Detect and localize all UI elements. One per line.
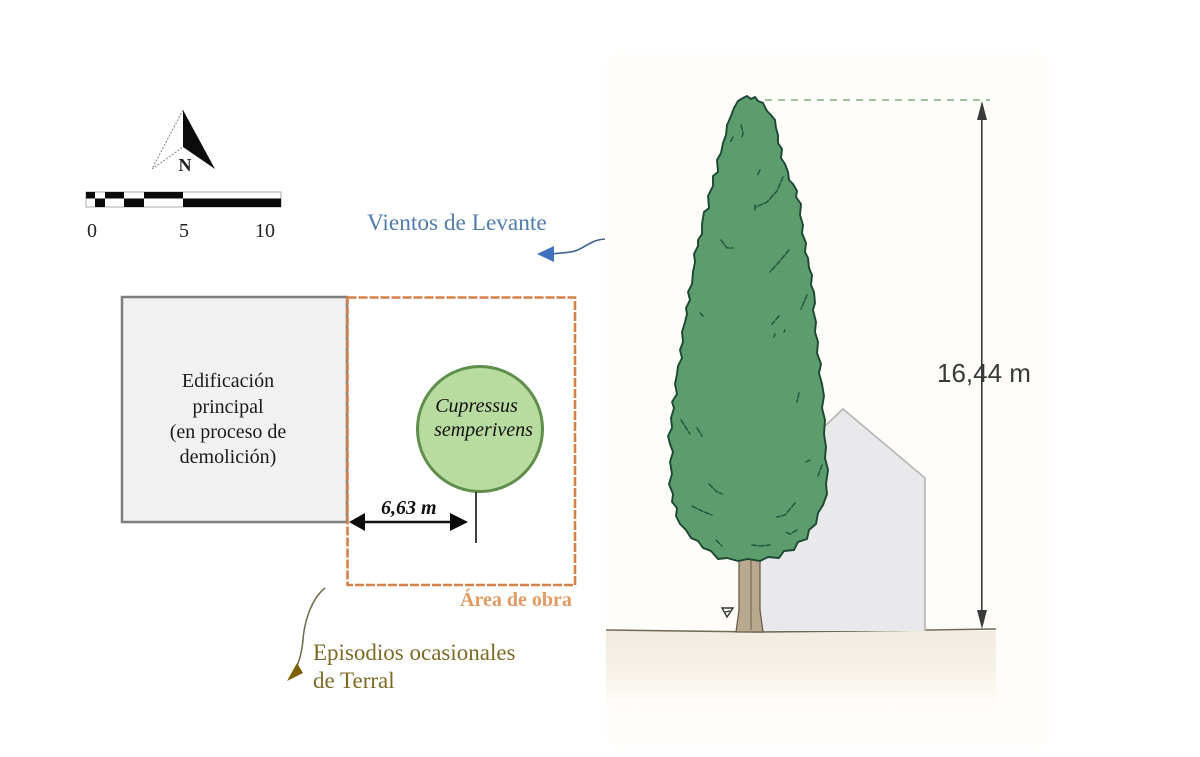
- foliage marks: [681, 125, 822, 546]
- label: Área de obra: Área de obra: [460, 588, 572, 611]
- panel: tree elevation background: [610, 55, 1046, 745]
- label: Vientos de Levante: Vientos de Levante: [367, 210, 547, 236]
- scale bar: 0: [87, 220, 97, 242]
- icon: north arrow: [152, 110, 215, 175]
- panel: main building: (en proceso de: [170, 421, 286, 443]
- tree trunk: [736, 558, 763, 632]
- tree crown: [668, 96, 828, 561]
- arrow: Levante wind: [537, 239, 605, 262]
- distance arrow: [349, 513, 468, 531]
- panel: work area: [348, 298, 575, 585]
- tree plan circle: [418, 366, 542, 492]
- tree axis line: [475, 492, 477, 543]
- height label: 16,44 m: [937, 358, 1031, 388]
- ground: [606, 629, 996, 706]
- distance label: 6,63 m: [381, 497, 437, 519]
- panel: main building: principal: [192, 396, 264, 418]
- icon: north arrow: N: [178, 155, 192, 175]
- panel: main building: demolición): [180, 446, 276, 468]
- height dimension arrow: [977, 101, 987, 629]
- small figure icon: [722, 608, 733, 617]
- tree plan circle: Cupressus: [435, 395, 518, 417]
- label: Episodios ocasionales de Terral: de Terral: [313, 668, 395, 693]
- scale bar: 5: [179, 220, 189, 242]
- label: Episodios ocasionales de Terral: Episodios ocasionales: [313, 640, 516, 665]
- scale bar: 10: [255, 220, 275, 242]
- top height reference line: [765, 99, 990, 101]
- house silhouette: [760, 409, 925, 631]
- arrow: Terral wind: [287, 588, 325, 681]
- panel: main building: [122, 297, 347, 522]
- tree plan circle: semperivens: [434, 419, 533, 441]
- panel: tree elevation drawing: [606, 96, 996, 706]
- panel: main building: Edificación: [182, 370, 274, 392]
- scale bar: [86, 192, 281, 242]
